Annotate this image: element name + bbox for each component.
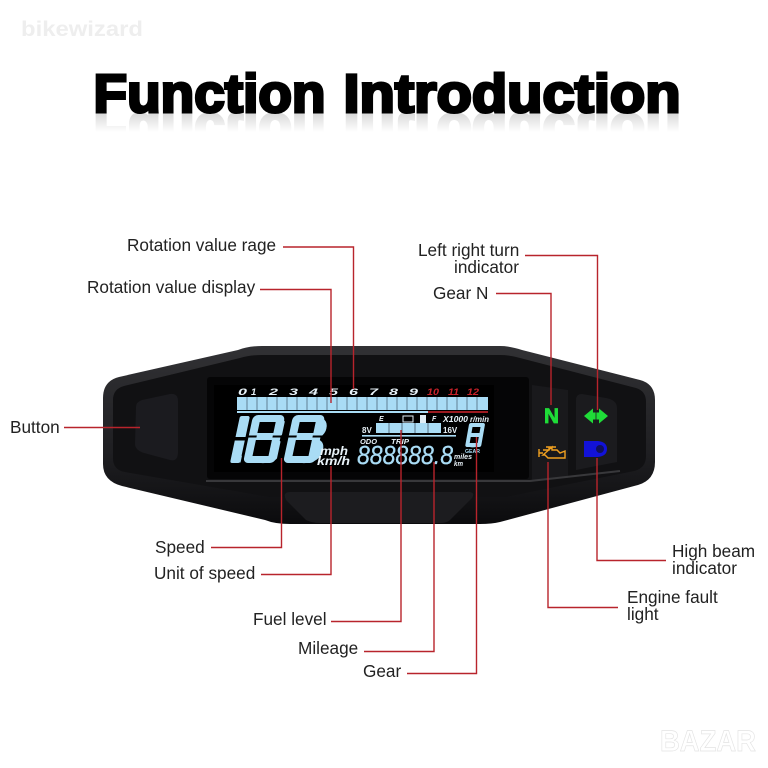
odometer: km (454, 461, 463, 468)
fuel gauge: E (379, 416, 384, 423)
callout: gear N: Gear N (433, 283, 488, 303)
rotation scale numbers (238, 387, 480, 398)
title text: Function (94, 64, 326, 124)
speed digits (224, 404, 335, 477)
speed unit: mph (320, 446, 348, 458)
callout: high beam indicator: indicator (672, 558, 737, 578)
callout: mileage: Mileage (298, 638, 358, 658)
icon: gear N: N (544, 405, 559, 428)
rotation scale numbers: 8 (389, 387, 399, 398)
callout: rotation value rage: Rotation value rage (127, 235, 276, 255)
icon: turn arrows (584, 408, 608, 424)
watermark: Bazar: BAZAR (660, 725, 756, 758)
callout: rotation value display (87, 277, 331, 403)
reflection cut (80, 132, 690, 172)
rotation scale numbers: 9 (409, 387, 419, 398)
gear digit: GEAR (465, 449, 480, 455)
callout: fuel level: Fuel level (253, 609, 327, 629)
rotation scale numbers: 1 (251, 387, 256, 398)
title reflection: Function (94, 102, 326, 162)
speed unit (317, 446, 350, 468)
lower bump (285, 492, 473, 523)
callout: speed: Speed (155, 537, 205, 557)
rpm unit: r/min (470, 415, 489, 424)
callout: gear (363, 437, 476, 681)
digit 1: 1 (226, 404, 254, 477)
rotation scale numbers: 6 (349, 387, 359, 398)
icon: high beam (584, 441, 607, 457)
odometer: miles (454, 454, 472, 461)
screen edge (214, 385, 494, 472)
callout: high beam indicator: High beam (672, 541, 755, 561)
callout: engine fault light: light (627, 604, 659, 624)
left indicator panel (532, 385, 568, 480)
rotation scale numbers: 4 (307, 387, 319, 398)
indicator panels (532, 385, 617, 480)
fuel gauge (362, 415, 458, 437)
rotation scale numbers: 7 (369, 387, 379, 398)
callout: rotation value rage (127, 235, 354, 389)
right indicator panel (576, 394, 617, 470)
icon: engine fault (539, 447, 565, 458)
callout: unit of speed (154, 466, 331, 583)
rotation scale numbers: 3 (289, 387, 299, 398)
watermark: bikewizard: bikewizard (21, 18, 143, 41)
speed unit: km/h (317, 456, 350, 468)
fuel icon (420, 415, 426, 423)
callout: left right turn indicator (418, 240, 598, 410)
title text: Introduction (344, 64, 680, 124)
rotation scale numbers: 11 (448, 387, 459, 398)
rotation scale numbers: 10 (427, 387, 440, 398)
gauge body (103, 346, 655, 524)
rotation scale numbers: 2 (267, 387, 279, 398)
title text (94, 64, 680, 124)
callout: unit of speed: Unit of speed (154, 563, 255, 583)
LCD screen (207, 377, 529, 479)
callout: gear: Gear (363, 661, 401, 681)
screen black panel (207, 377, 529, 479)
title reflection (94, 102, 680, 162)
title (80, 64, 690, 172)
battery icon (403, 416, 413, 422)
odometer: 888888.8 (357, 440, 453, 470)
fuel gauge: 16V (443, 426, 458, 435)
rpm unit: X1000 (442, 414, 468, 424)
odometer: TRIP (391, 437, 410, 446)
callout: button: Button (10, 417, 60, 437)
callout: high beam indicator (597, 458, 755, 578)
gauge face (113, 355, 646, 497)
rotation scale numbers: 12 (467, 387, 480, 398)
callout: fuel level (253, 430, 401, 629)
digits 88: 88 (241, 404, 335, 477)
fuel gauge: 8V (362, 426, 372, 435)
title reflection: Introduction (344, 102, 680, 162)
callout: left right turn indicator: indicator (454, 257, 519, 277)
fuel gauge: F (432, 416, 437, 423)
rotation scale numbers: 5 (329, 387, 339, 398)
callout: button (10, 417, 140, 437)
button (135, 394, 178, 460)
rpm unit (442, 414, 489, 424)
reflection fade (80, 113, 690, 132)
gear digit: 8 (464, 417, 486, 454)
callout: mileage (298, 462, 434, 658)
bevel line (206, 471, 620, 481)
rotation value bar (237, 397, 488, 413)
callout: engine fault light: Engine fault (627, 587, 718, 607)
odometer: ODO (360, 437, 377, 446)
callout: gear N (433, 283, 551, 405)
rotation scale numbers: 0 (238, 387, 248, 398)
gauge (103, 346, 655, 524)
callout: engine fault light (548, 462, 718, 624)
callout: rotation value display: Rotation value display (87, 277, 256, 297)
callout: left right turn indicator: Left right turn (418, 240, 519, 260)
callout: speed (155, 458, 282, 557)
